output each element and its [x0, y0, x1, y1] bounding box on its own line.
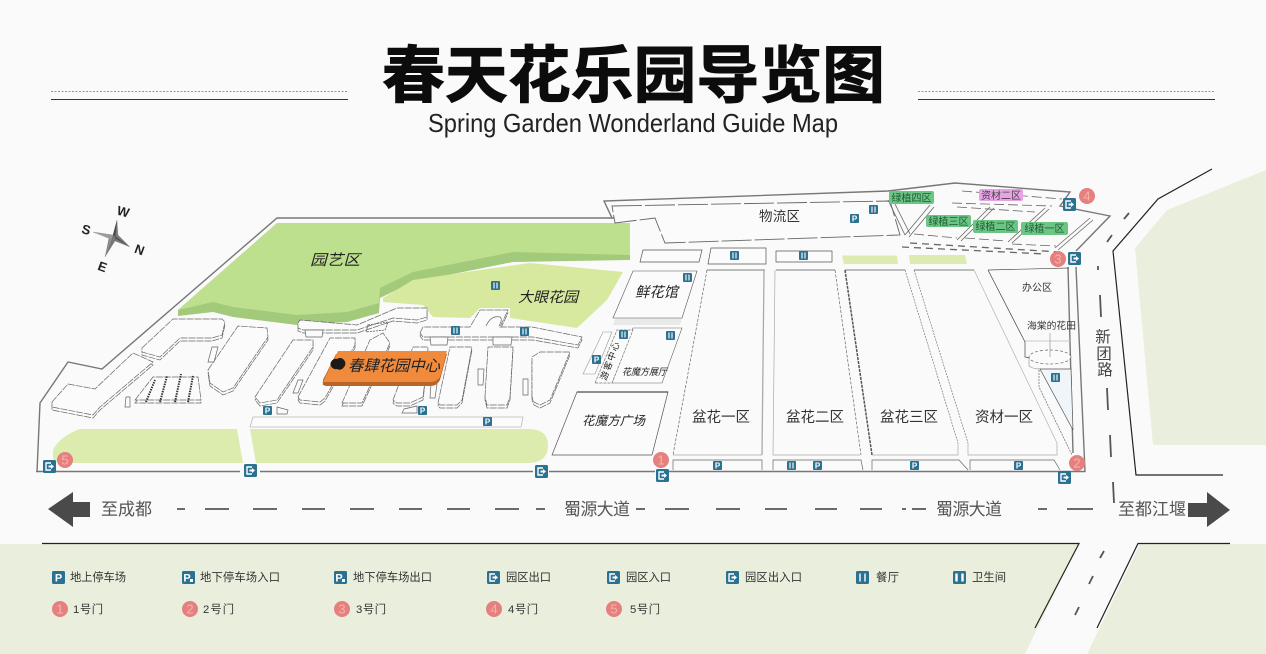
zone label: 资材一区: 资材一区	[975, 409, 1033, 426]
legend: gate 2	[182, 601, 234, 617]
legend: toilet	[953, 570, 1006, 584]
legend: gate 4	[486, 601, 538, 617]
road centre dashes	[177, 213, 1129, 615]
road label: 新团路: 团	[1096, 346, 1112, 363]
compass: N	[133, 241, 147, 258]
walkway strip	[250, 417, 523, 427]
legend: park entrance and exit: 园区出入口	[745, 570, 802, 584]
road label: 至成都: 至成都	[101, 500, 152, 519]
compass	[80, 203, 147, 275]
legend: park exit	[487, 570, 551, 584]
compass: S	[80, 221, 93, 238]
small bars north of zones	[640, 248, 832, 264]
legend: park entrance: 园区入口	[626, 571, 671, 584]
legend: gate 2: 2	[186, 602, 194, 616]
海棠的花田 feature: 海棠的花田	[1027, 319, 1076, 332]
road label: 蜀源大道 west: 蜀源大道	[564, 500, 630, 519]
legend: surface parking: P	[55, 572, 62, 584]
legend: underground parking entrance	[182, 570, 280, 584]
gate markers: 4	[1083, 188, 1091, 204]
arrow: to Dujiangyan	[1188, 492, 1230, 527]
map exit icons	[43, 198, 1081, 484]
road label: 新团路	[1095, 328, 1113, 379]
绿植四区 tag: 绿植四区	[892, 192, 932, 204]
legend: toilet: 卫生间	[972, 570, 1006, 584]
garden centre buildings	[52, 308, 582, 418]
zone: 大眼花园 garden: 大眼花园	[518, 289, 581, 306]
gate markers: 5	[61, 452, 69, 468]
legend: gate 5	[606, 601, 660, 617]
gate markers: 2	[1073, 456, 1081, 470]
legend: gate 4: 4	[490, 602, 498, 616]
legend: gate 1	[52, 601, 103, 617]
map parking icons: P	[485, 418, 491, 426]
map parking icons: P	[715, 462, 721, 470]
map parking icons: P	[594, 356, 600, 364]
legend: park exit: 园区出口	[506, 570, 551, 584]
title: 春天花乐园导览图	[382, 25, 885, 115]
春肆花园中心 label	[323, 351, 447, 386]
compass: E	[96, 258, 109, 275]
花魔方展厅: 花魔方展厅	[622, 366, 668, 378]
legend: park entrance and exit	[726, 570, 802, 584]
legend: gate 5: 5	[610, 602, 618, 616]
legend: park entrance	[607, 571, 671, 584]
map parking icons: P	[912, 462, 918, 470]
legend: underground parking exit: 地下停车场出口	[353, 570, 432, 584]
办公区 label: 办公区	[1022, 281, 1052, 294]
gate markers: 3	[1054, 252, 1062, 266]
title rules	[51, 92, 1215, 100]
site boundary	[36, 183, 1110, 472]
花魔方广场: 花魔方广场	[582, 414, 646, 428]
zone: 大眼花园 garden	[383, 263, 623, 328]
map parking icons: P	[1016, 462, 1022, 470]
legend: gate 2: 2号门	[203, 602, 234, 616]
plant area	[888, 191, 1093, 254]
legend: gate 3: 3	[338, 602, 346, 616]
legend: surface parking	[52, 570, 126, 584]
绿植一区 tag: 绿植一区	[1024, 222, 1064, 235]
legend: underground parking exit: P	[335, 572, 343, 584]
lower lawns	[53, 429, 548, 463]
gate markers: 1	[657, 452, 665, 468]
legend: underground parking entrance: P	[183, 572, 191, 584]
legend	[52, 570, 1006, 617]
花魔方广场	[552, 392, 668, 455]
map restaurant and toilet icons	[451, 205, 1060, 470]
map parking icons: P	[815, 462, 821, 470]
鲜花馆	[613, 271, 697, 325]
绿植三区 tag: 绿植三区	[928, 215, 968, 228]
legend: underground parking entrance: 地下停车场入口	[200, 570, 280, 584]
gate markers	[57, 188, 1095, 471]
legend: restaurant: 餐厅	[876, 570, 899, 584]
游客中心 strip	[595, 330, 633, 383]
春肆花园中心 label: 春肆花园中心	[348, 357, 440, 375]
subtitle: Spring Garden Wonderland Guide Map	[428, 108, 838, 138]
zone label: 盆花一区: 盆花一区	[692, 409, 750, 426]
zone label: 盆花二区: 盆花二区	[786, 409, 844, 426]
building annexes	[125, 330, 528, 414]
surrounding green land	[0, 170, 1266, 654]
compass: W	[115, 203, 132, 221]
parking strip	[583, 332, 612, 374]
road label: 至都江堰: 至都江堰	[1118, 500, 1186, 519]
legend: surface parking: 地上停车场	[70, 570, 126, 584]
zone label: 盆花三区: 盆花三区	[880, 409, 938, 426]
legend: gate 3	[334, 601, 386, 617]
zone: 园艺区 lawn: 园艺区	[310, 252, 362, 269]
map parking icons: P	[265, 406, 271, 416]
legend: underground parking exit	[334, 570, 432, 584]
资材二区 tag: 资材二区	[981, 189, 1021, 202]
海棠的花田 feature	[988, 270, 1076, 455]
zone: 园艺区 lawn	[178, 223, 630, 325]
花魔方展厅	[612, 328, 682, 383]
road edge lines	[42, 169, 1230, 628]
legend: gate 1: 1号门	[73, 602, 103, 616]
绿植二区 tag: 绿植二区	[976, 220, 1016, 233]
zone lines	[673, 268, 1069, 470]
map parking icons	[263, 214, 1023, 470]
legend: gate 4: 4号门	[508, 602, 538, 616]
legend: gate 5: 5号门	[630, 602, 660, 616]
游客中心 strip: 游客中心	[598, 340, 622, 382]
legend: gate 1: 1	[56, 602, 64, 616]
legend: gate 3: 3号门	[356, 602, 386, 616]
map parking icons: P	[852, 214, 858, 224]
arrow: to Chengdu	[48, 492, 90, 527]
zone: 物流区	[612, 201, 900, 243]
map parking icons: P	[420, 406, 426, 416]
road label: 新团路: 新	[1095, 328, 1111, 346]
legend: restaurant	[856, 570, 899, 584]
road label: 蜀源大道 east: 蜀源大道	[936, 500, 1002, 519]
鲜花馆: 鲜花馆	[635, 284, 680, 301]
road label: 新团路: 路	[1097, 361, 1113, 379]
zone: 物流区: 物流区	[759, 209, 800, 224]
